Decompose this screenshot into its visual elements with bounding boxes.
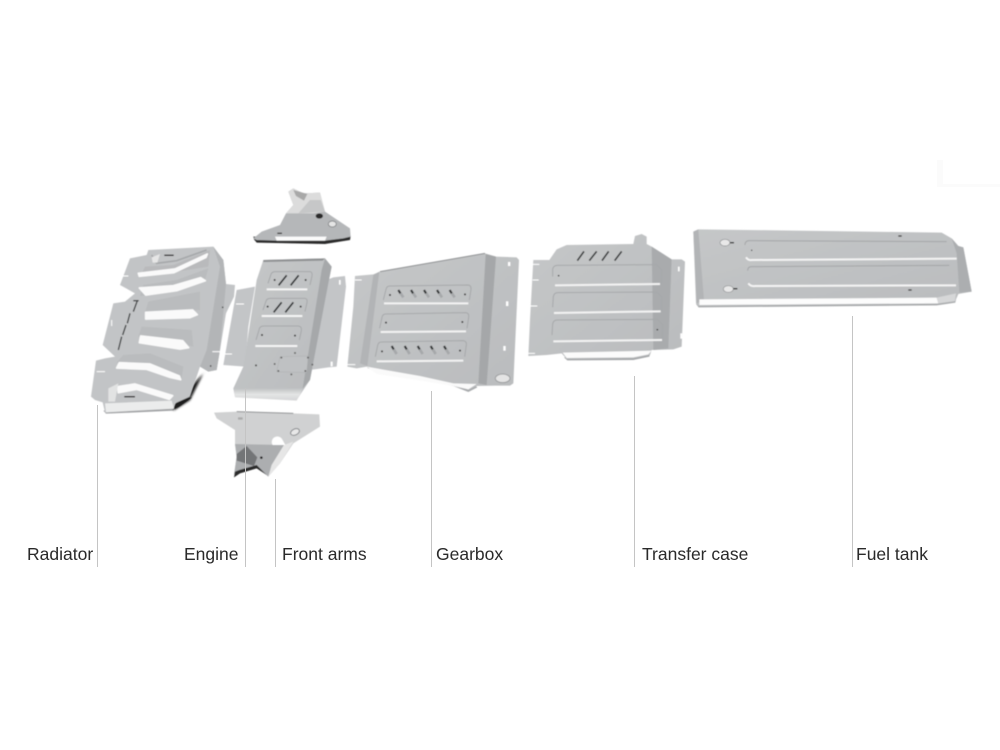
label: Transfer case: Transfer case (642, 544, 748, 564)
leader line: gearbox (430, 391, 432, 567)
leader line: engine (244, 388, 246, 567)
part: transfer case skid plate (528, 234, 685, 360)
part: upper front arm skid plate (253, 188, 351, 244)
part: radiator skid plate (91, 247, 235, 414)
part: engine skid plate (223, 258, 346, 401)
label: Front arms: Front arms (282, 544, 367, 564)
label: Radiator: Radiator (27, 544, 93, 564)
leader line: radiator (96, 405, 98, 567)
label: Engine: Engine (184, 544, 238, 564)
leader line: front arms (274, 479, 276, 567)
label: Fuel tank: Fuel tank (856, 544, 928, 564)
leader line: transfer case (634, 376, 636, 567)
part: fuel tank skid plate (693, 229, 972, 307)
faint background corner mark (937, 160, 1000, 187)
part: lower front arm skid plate (214, 412, 320, 477)
part: gearbox skid plate (347, 253, 519, 392)
label: Gearbox: Gearbox (436, 544, 503, 564)
leader line: fuel tank (852, 316, 854, 567)
